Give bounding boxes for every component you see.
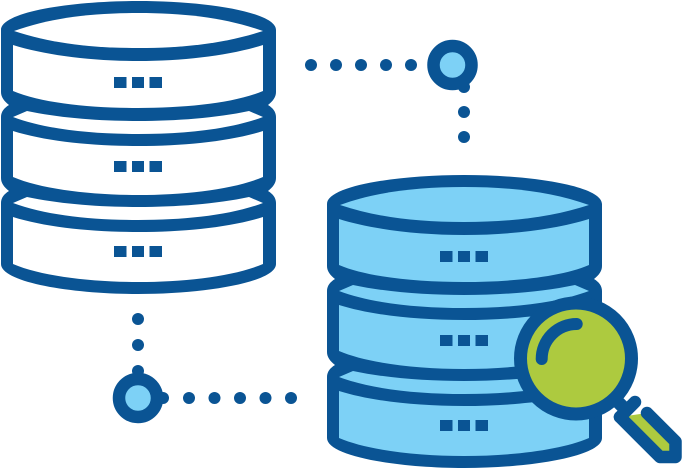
icon: magnifying glass — [520, 303, 676, 457]
icon: right database (blue) — [327, 175, 602, 468]
icon: left database (white) — [1, 1, 276, 294]
connector: top dotted line with node — [305, 46, 472, 143]
connector: bottom dotted line with node — [119, 313, 297, 417]
